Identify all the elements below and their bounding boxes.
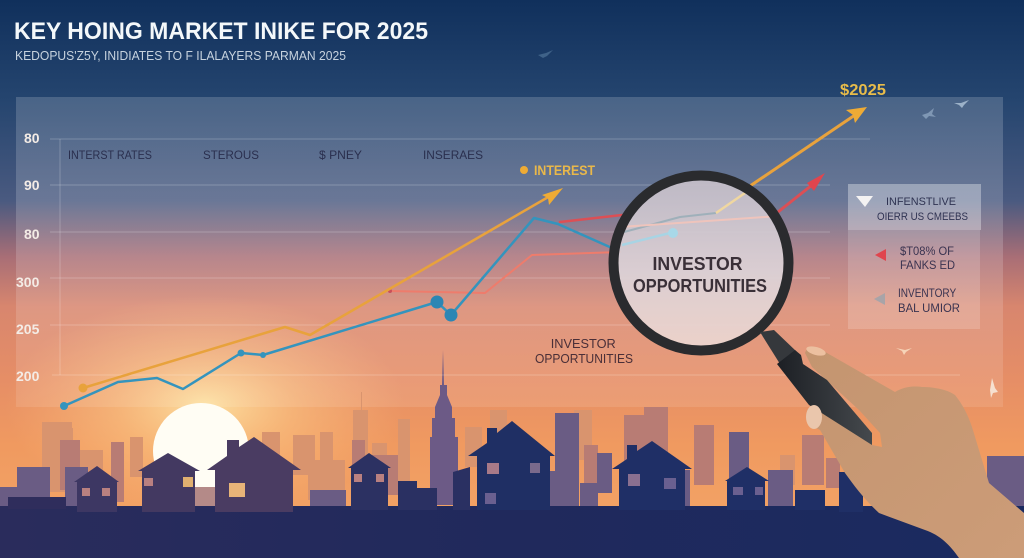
hand — [777, 345, 1024, 558]
y axis labels: 300 — [16, 274, 40, 290]
house 2 — [138, 453, 200, 512]
sun — [153, 403, 249, 499]
skyline: dark houses and foreground silhouette — [0, 421, 1024, 558]
house 6 — [612, 441, 692, 510]
y axis labels: 80 — [24, 130, 40, 146]
legend triangle red — [875, 249, 886, 261]
chart column headers: $ PNEY — [319, 148, 362, 162]
lens label: INVESTOR — [652, 254, 742, 274]
dark block near hand — [795, 490, 825, 510]
skyline: middle buildings — [60, 407, 840, 502]
red rising arrow — [778, 173, 825, 212]
side legend panel — [848, 184, 981, 329]
chart column headers: INSERAES — [423, 148, 483, 162]
thumbnail — [806, 405, 822, 429]
windows — [82, 463, 763, 504]
house 4 — [348, 453, 391, 510]
legend inventory text: INVENTORY — [898, 286, 956, 300]
house 7 — [725, 467, 769, 510]
skyscraper spire — [430, 350, 458, 505]
orange line series with arrow — [78, 188, 563, 392]
house 3 — [207, 437, 301, 512]
y axis labels — [16, 130, 40, 384]
tower block — [398, 481, 417, 510]
lens rim — [614, 176, 788, 350]
y axis labels: 205 — [16, 321, 40, 337]
chart panel background — [16, 97, 1003, 407]
investor opportunities caption: OPPORTUNITIES — [535, 352, 633, 366]
legend stat text: FANKS ED — [900, 258, 955, 272]
skyline: near purple buildings — [0, 413, 1024, 510]
legend header — [848, 184, 981, 230]
magnifier handle — [777, 350, 872, 445]
y axis labels: 90 — [24, 177, 40, 193]
chart column headers — [68, 148, 483, 162]
interest legend label: INTEREST — [534, 163, 596, 178]
grid lines — [50, 139, 960, 375]
title: KEY HOING MARKET INIKE FOR 2025 — [14, 18, 428, 45]
y axis labels: 200 — [16, 368, 40, 384]
2025 value label: $2025 — [840, 82, 886, 99]
legend stat text: $T08% OF — [900, 244, 954, 258]
birds — [538, 50, 998, 398]
chart column headers: STEROUS — [203, 148, 259, 162]
lens glass — [618, 180, 784, 346]
legend triangle white — [856, 196, 873, 207]
legend triangle grey — [874, 293, 885, 305]
lens label: OPPORTUNITIES — [633, 276, 767, 296]
index fingernail — [805, 345, 827, 357]
lines seen through lens — [620, 193, 780, 245]
rising arrow to 2025 — [750, 107, 867, 186]
skyline: distant buildings — [42, 392, 795, 500]
lit windows — [183, 477, 193, 487]
legend header text: INFENSTLIVE — [886, 196, 956, 208]
y axis labels: 80 — [24, 226, 40, 242]
house 1 — [74, 466, 119, 512]
legend header text: OIERR US CMEEBS — [877, 211, 968, 223]
chart column headers: INTERST RATES — [68, 148, 152, 162]
red line series — [388, 215, 622, 293]
subtitle: KEDOPUS'Z5Y, INIDIATES TO F ILALAYERS PARMAN 2025 — [15, 48, 346, 63]
sun glow — [5, 295, 405, 515]
legend body — [848, 230, 980, 329]
blue line series — [60, 218, 612, 410]
house 5 — [468, 421, 555, 510]
legend inventory text: BAL UMIOR — [898, 301, 960, 315]
magnifying glass — [614, 176, 797, 364]
handle neck — [760, 330, 797, 364]
ground — [0, 506, 1024, 558]
investor opportunities caption: INVESTOR — [551, 337, 616, 351]
left low block — [8, 497, 66, 509]
